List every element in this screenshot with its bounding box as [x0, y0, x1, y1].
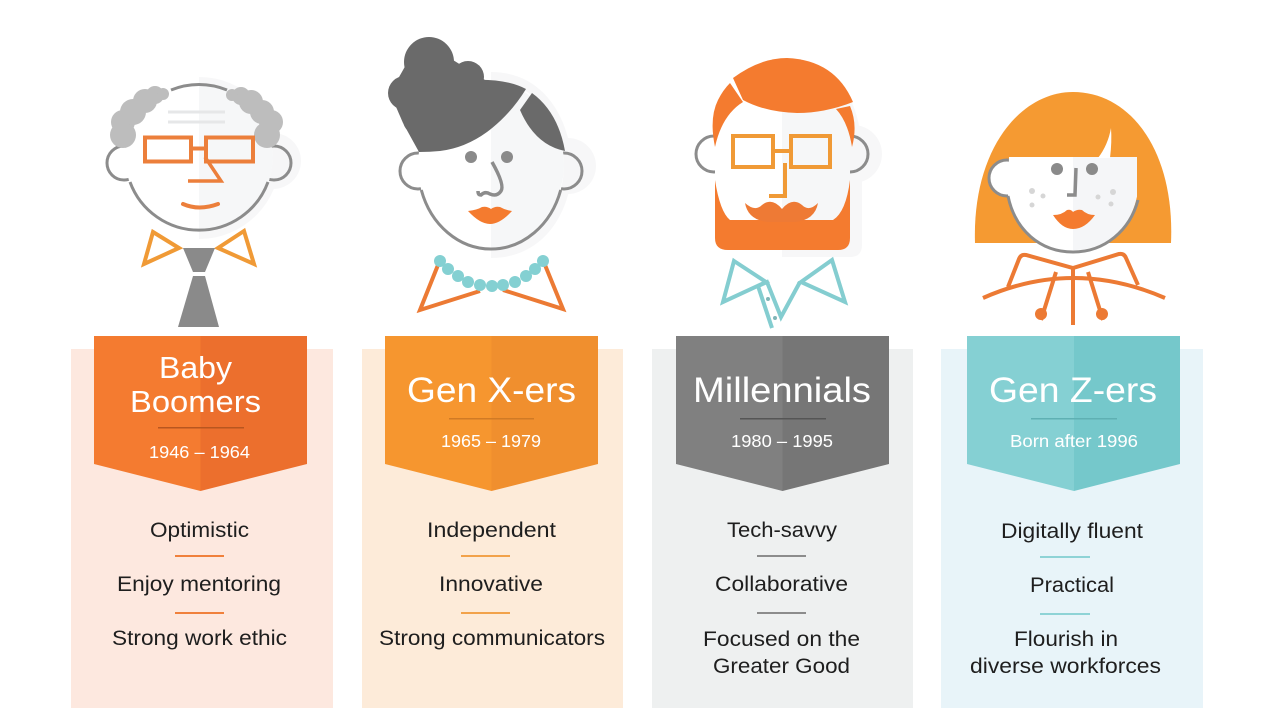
- tie: [178, 248, 219, 327]
- traits list: Enjoy mentoring: [117, 573, 281, 596]
- traits list: [112, 519, 287, 650]
- right side of face: [1073, 157, 1137, 250]
- head outline: [130, 84, 268, 230]
- banner: [967, 336, 1180, 491]
- banner: 1980 – 1995: [731, 431, 833, 451]
- banner: Gen X-ers: [407, 371, 576, 410]
- hair: [975, 92, 1171, 243]
- panel: Baby Boomers: [71, 336, 333, 708]
- ears: [400, 153, 582, 189]
- banner: Baby: [159, 350, 233, 385]
- hoodie string toggles: [1035, 308, 1108, 320]
- panel: Gen X-ers: [362, 336, 623, 708]
- glasses, nose and mouth: [145, 138, 253, 208]
- panel background: [362, 349, 623, 708]
- hair: [110, 86, 283, 148]
- traits list: Focused on the: [703, 628, 860, 651]
- banner: 1965 – 1979: [441, 431, 541, 451]
- lips: [468, 207, 512, 224]
- shirt collar: [723, 260, 845, 328]
- icon: Millennial man: [696, 58, 882, 328]
- ears: [107, 146, 291, 180]
- glasses and nose: [733, 136, 830, 196]
- panel: Gen Z-ers: [941, 336, 1203, 708]
- eyes: [465, 151, 513, 163]
- panel background: [71, 349, 333, 708]
- traits list: [703, 519, 860, 678]
- banner: Boomers: [130, 384, 261, 419]
- face: [1008, 157, 1137, 252]
- icon: Gen Z woman: [975, 92, 1171, 325]
- banner: Gen Z-ers: [989, 371, 1157, 410]
- hoodie: [983, 254, 1165, 325]
- banner: [676, 336, 889, 491]
- face outline: [1008, 196, 1138, 252]
- traits list: diverse workforces: [970, 655, 1161, 678]
- shirt buttons: [766, 297, 777, 320]
- freckles: [1029, 188, 1116, 208]
- nose: [478, 162, 502, 195]
- traits list: Digitally fluent: [1001, 520, 1143, 543]
- ears: [696, 136, 868, 172]
- face: [715, 80, 850, 240]
- hair: [713, 58, 855, 147]
- moustache: [745, 202, 818, 222]
- nose: [1067, 168, 1076, 195]
- traits list: [379, 519, 605, 650]
- icon: Baby Boomer man: [107, 77, 301, 327]
- collar: [420, 265, 563, 310]
- traits list: Independent: [427, 519, 556, 542]
- traits list: [970, 520, 1161, 678]
- traits list: Strong communicators: [379, 627, 605, 650]
- face shading: [199, 77, 301, 239]
- traits list: Practical: [1030, 574, 1114, 597]
- hair: [388, 37, 565, 152]
- eyes: [1051, 163, 1098, 175]
- head: [126, 84, 272, 232]
- banner: [385, 336, 598, 491]
- right side of face: [199, 84, 272, 232]
- traits list: Innovative: [439, 573, 543, 596]
- banner: Millennials: [693, 371, 871, 410]
- banner: [94, 336, 307, 491]
- bang slit: [1098, 128, 1111, 158]
- right side of face: [491, 81, 564, 249]
- traits list: Tech-savvy: [727, 519, 838, 542]
- panel background: [652, 349, 913, 708]
- traits list: Strong work ethic: [112, 627, 287, 650]
- beard: [715, 180, 850, 250]
- banner: Born after 1996: [1010, 431, 1138, 451]
- panel background: [941, 349, 1203, 708]
- traits list: Greater Good: [713, 655, 850, 678]
- traits list: Optimistic: [150, 519, 249, 542]
- bow collar: [144, 231, 254, 264]
- ear: [989, 160, 1025, 196]
- panel: Millennials: [652, 336, 913, 708]
- face shading: [491, 72, 596, 258]
- necklace: [434, 255, 549, 292]
- head outline: [421, 190, 561, 249]
- face shading: [782, 90, 882, 257]
- icon: Gen X woman: [388, 37, 596, 310]
- banner: 1946 – 1964: [149, 442, 250, 462]
- forehead wrinkles: [168, 112, 225, 122]
- traits list: Collaborative: [715, 573, 848, 596]
- traits list: Flourish in: [1014, 628, 1118, 651]
- right side of face: [782, 100, 850, 240]
- lips: [1053, 210, 1095, 229]
- head: [418, 81, 564, 249]
